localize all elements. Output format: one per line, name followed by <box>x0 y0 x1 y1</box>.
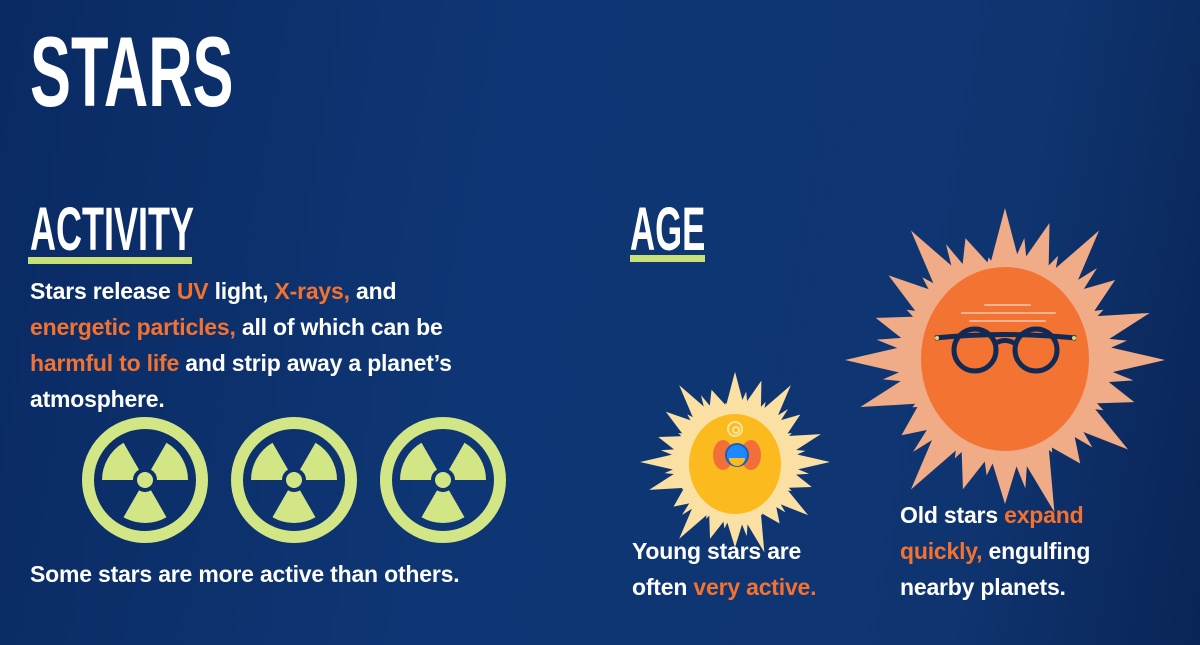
text: activity description: atmosphere. <box>30 386 165 412</box>
title: STARS <box>30 16 233 127</box>
text: activity description <box>30 278 452 412</box>
text: activity description: Stars release UV light, X-rays, and <box>30 278 396 304</box>
icon: young star <box>640 372 830 552</box>
text: young stars: often very active. <box>632 574 816 600</box>
icon: old star <box>845 208 1165 512</box>
text: some stars: Some stars are more active than others. <box>30 561 459 587</box>
icon: radiation 2 <box>237 423 351 537</box>
text: activity description: harmful to life and strip away a planet’s <box>30 350 452 376</box>
text: activity description: energetic particles, all of which can be <box>30 314 443 340</box>
text: young stars: Young stars are <box>632 538 801 564</box>
text: young stars <box>632 538 816 600</box>
icon: radiation 1 <box>88 423 202 537</box>
text: old stars: Old stars expand <box>900 502 1083 528</box>
heading: age: AGE <box>630 195 705 263</box>
text: old stars <box>900 502 1090 600</box>
text: old stars: quickly, engulfing <box>900 538 1090 564</box>
text: old stars: nearby planets. <box>900 574 1066 600</box>
heading: activity: ACTIVITY <box>30 195 194 263</box>
icon: radiation 3 <box>386 423 500 537</box>
